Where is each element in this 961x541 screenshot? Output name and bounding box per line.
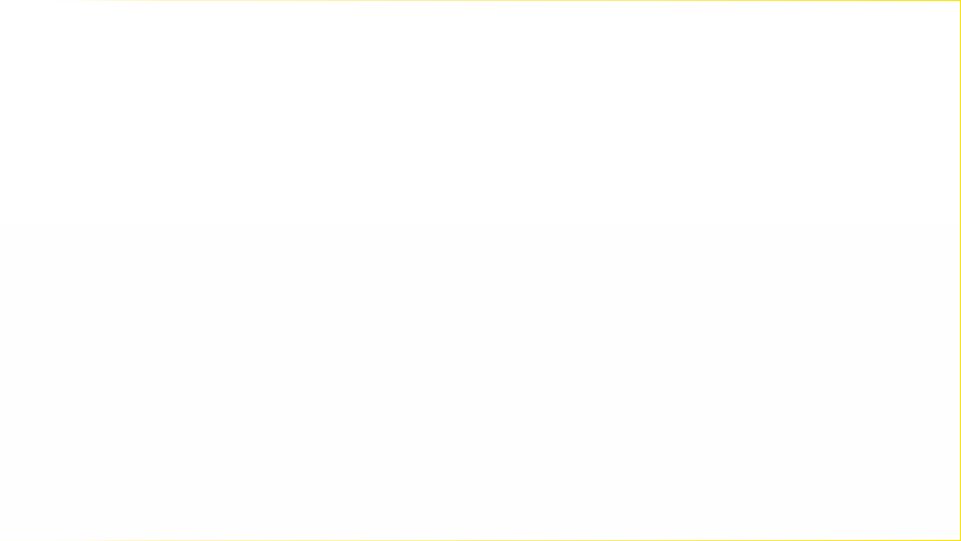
bottom border line <box>0 540 961 541</box>
top border line <box>0 0 961 1</box>
right border line <box>960 0 961 541</box>
left faint edge <box>0 0 1 541</box>
